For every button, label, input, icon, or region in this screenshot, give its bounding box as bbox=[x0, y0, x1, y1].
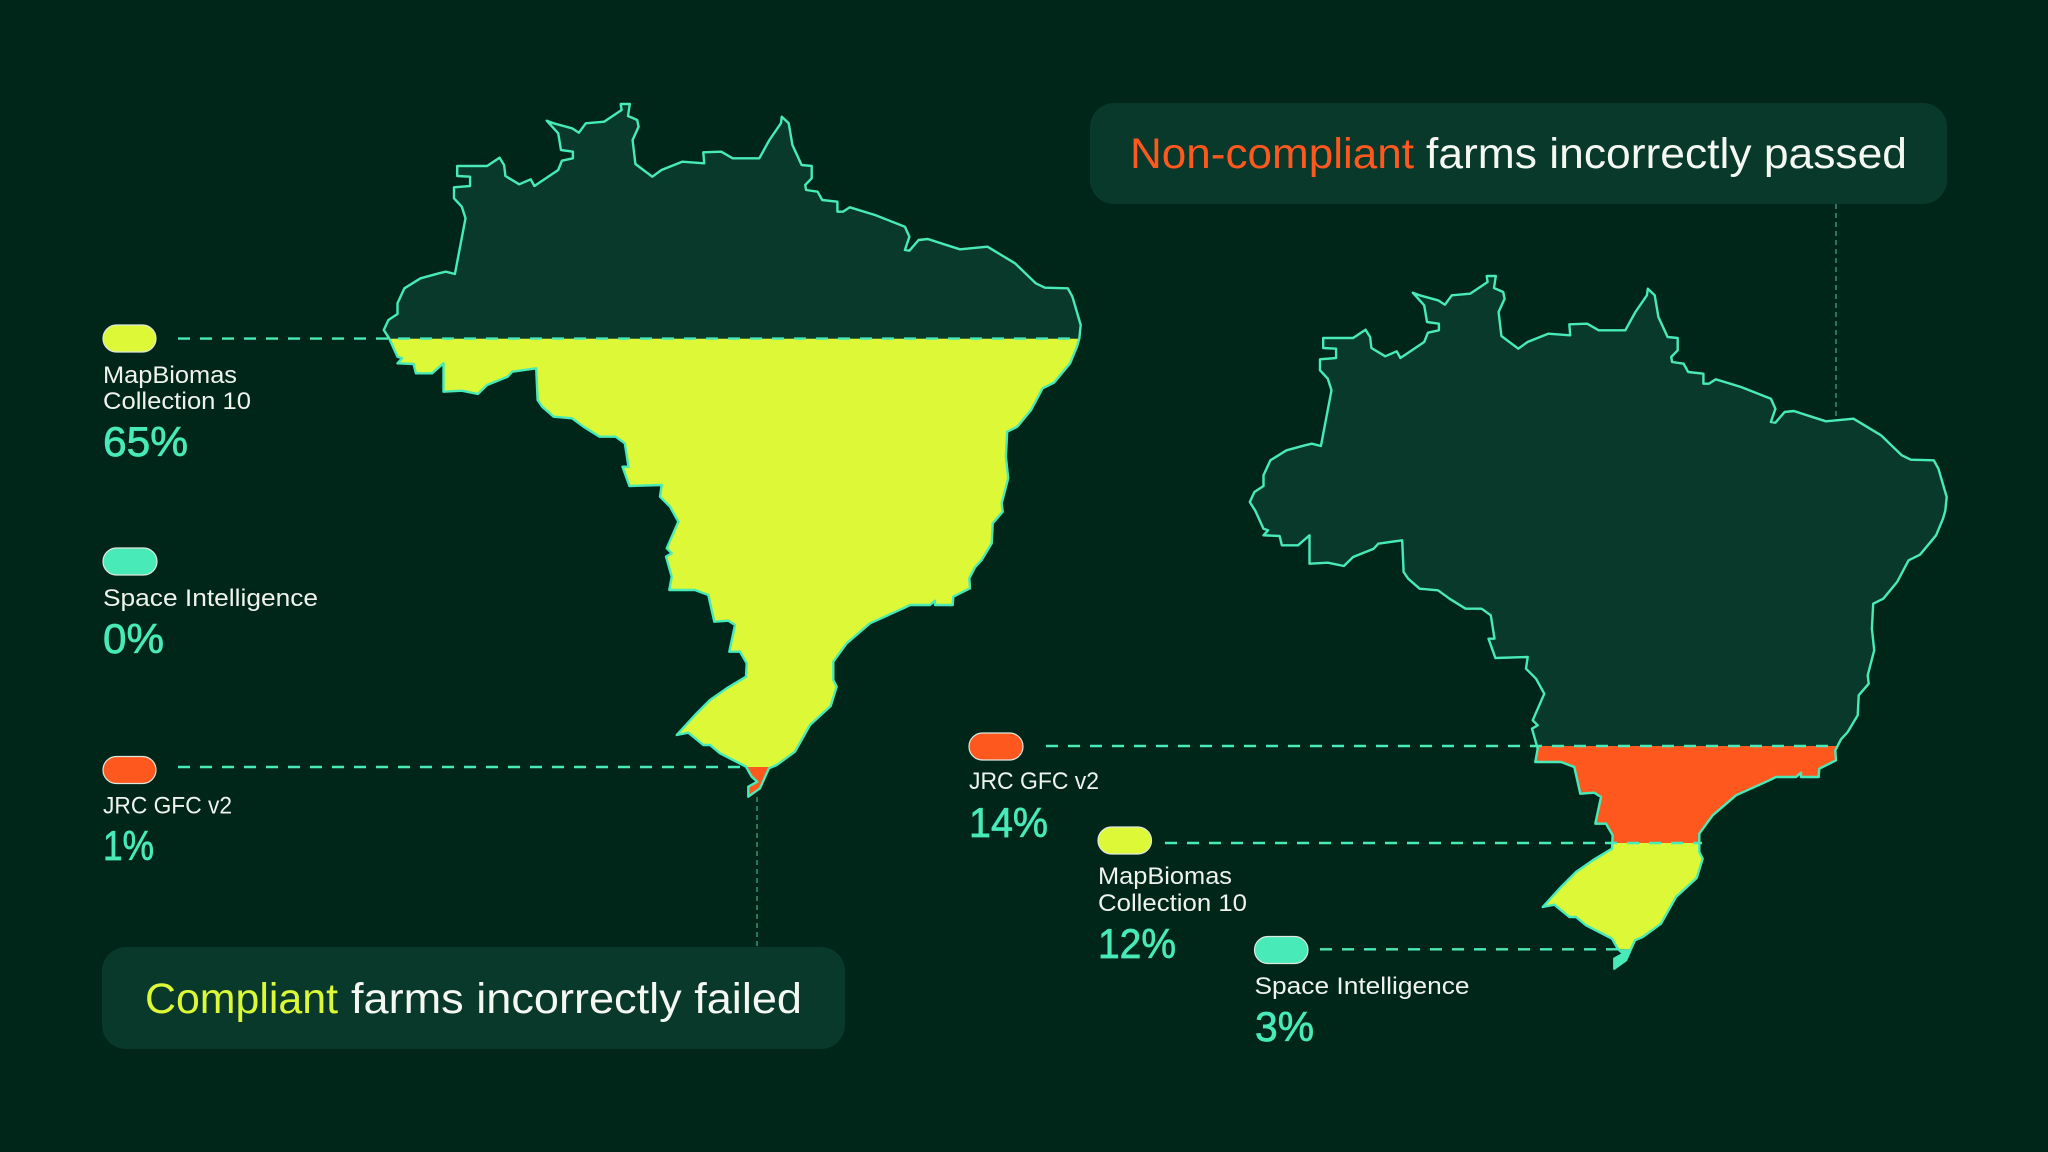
legend: Space Intelligence left: Space Intelligence bbox=[103, 585, 318, 612]
legend: MapBiomas right: Collection 10 bbox=[1098, 890, 1247, 917]
heading text: farms incorrectly failed bbox=[351, 975, 802, 1023]
panel: non-compliant farms heading bbox=[1090, 103, 1947, 204]
legend: Space Intelligence left bbox=[103, 548, 318, 662]
leader line: MapBiomas right bbox=[1165, 842, 1702, 844]
legend: JRC right bbox=[969, 733, 1099, 846]
legend: Space Intelligence right: 3% bbox=[1255, 1003, 1314, 1050]
leader line: Space Intelligence right bbox=[1320, 948, 1620, 950]
leader line: JRC right bbox=[1046, 745, 1836, 747]
leader line: panel to right map bbox=[1835, 204, 1837, 418]
legend: Space Intelligence right: Space Intelligence bbox=[1254, 973, 1470, 1000]
map: non-compliant farms incorrectly passed bbox=[1236, 262, 1966, 979]
heading text: Non-compliant bbox=[1130, 130, 1414, 178]
legend: MapBiomas right: MapBiomas bbox=[1098, 863, 1232, 890]
legend: MapBiomas right: 12% bbox=[1098, 920, 1176, 967]
legend: MapBiomas left: Collection 10 bbox=[103, 388, 251, 415]
legend: Space Intelligence left: 0% bbox=[103, 615, 164, 662]
heading text: farms incorrectly passed bbox=[1426, 130, 1907, 178]
legend: Space Intelligence right bbox=[1254, 936, 1470, 1050]
heading text bbox=[1130, 130, 1907, 178]
legend: JRC left: 1% bbox=[103, 822, 154, 869]
legend: JRC left bbox=[103, 756, 232, 869]
legend: MapBiomas left: 65% bbox=[103, 418, 188, 465]
legend: JRC right: 14% bbox=[969, 799, 1048, 846]
legend: JRC left: JRC GFC v2 bbox=[103, 792, 232, 820]
leader line: MapBiomas left bbox=[178, 337, 1080, 340]
heading text bbox=[145, 975, 802, 1023]
heading text: Compliant bbox=[145, 975, 338, 1023]
legend: MapBiomas left bbox=[103, 325, 251, 465]
legend: MapBiomas right bbox=[1098, 827, 1247, 967]
map: compliant farms incorrectly failed bbox=[370, 90, 1100, 807]
legend: JRC right: JRC GFC v2 bbox=[969, 768, 1099, 795]
legend: MapBiomas left: MapBiomas bbox=[103, 362, 237, 389]
leader line: panel to left map bbox=[756, 797, 758, 947]
leader line: JRC left bbox=[178, 766, 746, 768]
panel: compliant farms heading bbox=[102, 947, 845, 1049]
